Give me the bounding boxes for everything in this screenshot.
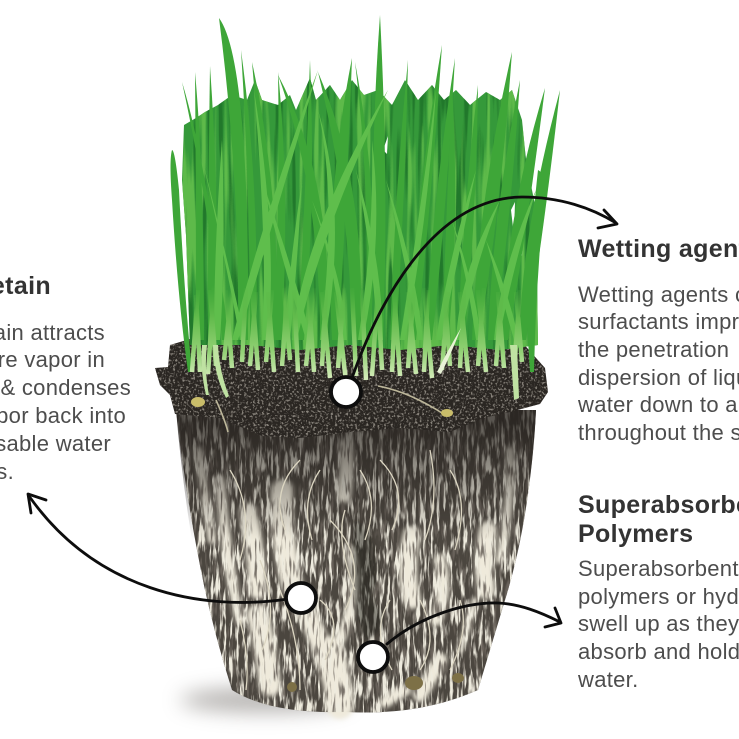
text block: retain	[0, 320, 131, 484]
marker: polymers	[358, 642, 388, 672]
text block: superabsorbent polymers: swell up as they	[578, 611, 739, 636]
grass mass	[182, 78, 538, 350]
ground shadow	[180, 688, 350, 712]
text block: retain: re vapor in	[0, 347, 105, 372]
text block: retain: por back into	[0, 403, 126, 428]
darker upper roots	[176, 410, 536, 540]
text block: superabsorbent polymers: polymers or hyd	[578, 584, 739, 609]
arrow: roots to retain	[28, 494, 288, 602]
marker: soil	[331, 377, 361, 407]
soil layer	[155, 332, 548, 438]
heading: superabsorbent polymers	[578, 491, 739, 548]
long front stems	[202, 345, 519, 400]
white root bands	[198, 445, 510, 705]
mid green blades	[170, 15, 560, 372]
stems in soil	[216, 386, 445, 432]
gaps between blades	[196, 136, 523, 296]
marker: retain	[286, 583, 316, 613]
arrow: roots to superabsorbent polymers	[387, 603, 561, 644]
grass blades	[170, 15, 560, 400]
text block: superabsorbent polymers: absorb and hold	[578, 639, 739, 664]
text block: wetting agents: throughout the s	[578, 420, 739, 445]
text block: superabsorbent polymers: Superabsorbent	[578, 556, 739, 581]
text block: superabsorbent polymers: water.	[577, 667, 638, 692]
pale stems	[192, 285, 522, 382]
light green blades	[200, 70, 536, 340]
root fine hairs	[230, 450, 463, 690]
text block: wetting agents: surfactants impr	[578, 309, 739, 334]
text block: wetting agents	[577, 282, 739, 445]
illustration: grass plug with soil and roots	[155, 15, 560, 713]
text block: superabsorbent polymers	[577, 556, 739, 692]
arrow: soil to wetting agents	[352, 197, 617, 378]
root ball	[176, 410, 536, 713]
text block: wetting agents: the penetration	[578, 337, 729, 362]
dark soil patch in centre	[352, 520, 382, 640]
text block: wetting agents: water down to a	[577, 392, 738, 417]
text block: retain: & condenses	[0, 375, 131, 400]
stones at base	[287, 673, 464, 692]
heading: superabsorbent polymers: Polymers	[578, 520, 693, 548]
root fine texture	[176, 410, 536, 713]
pale leaf	[437, 328, 461, 374]
